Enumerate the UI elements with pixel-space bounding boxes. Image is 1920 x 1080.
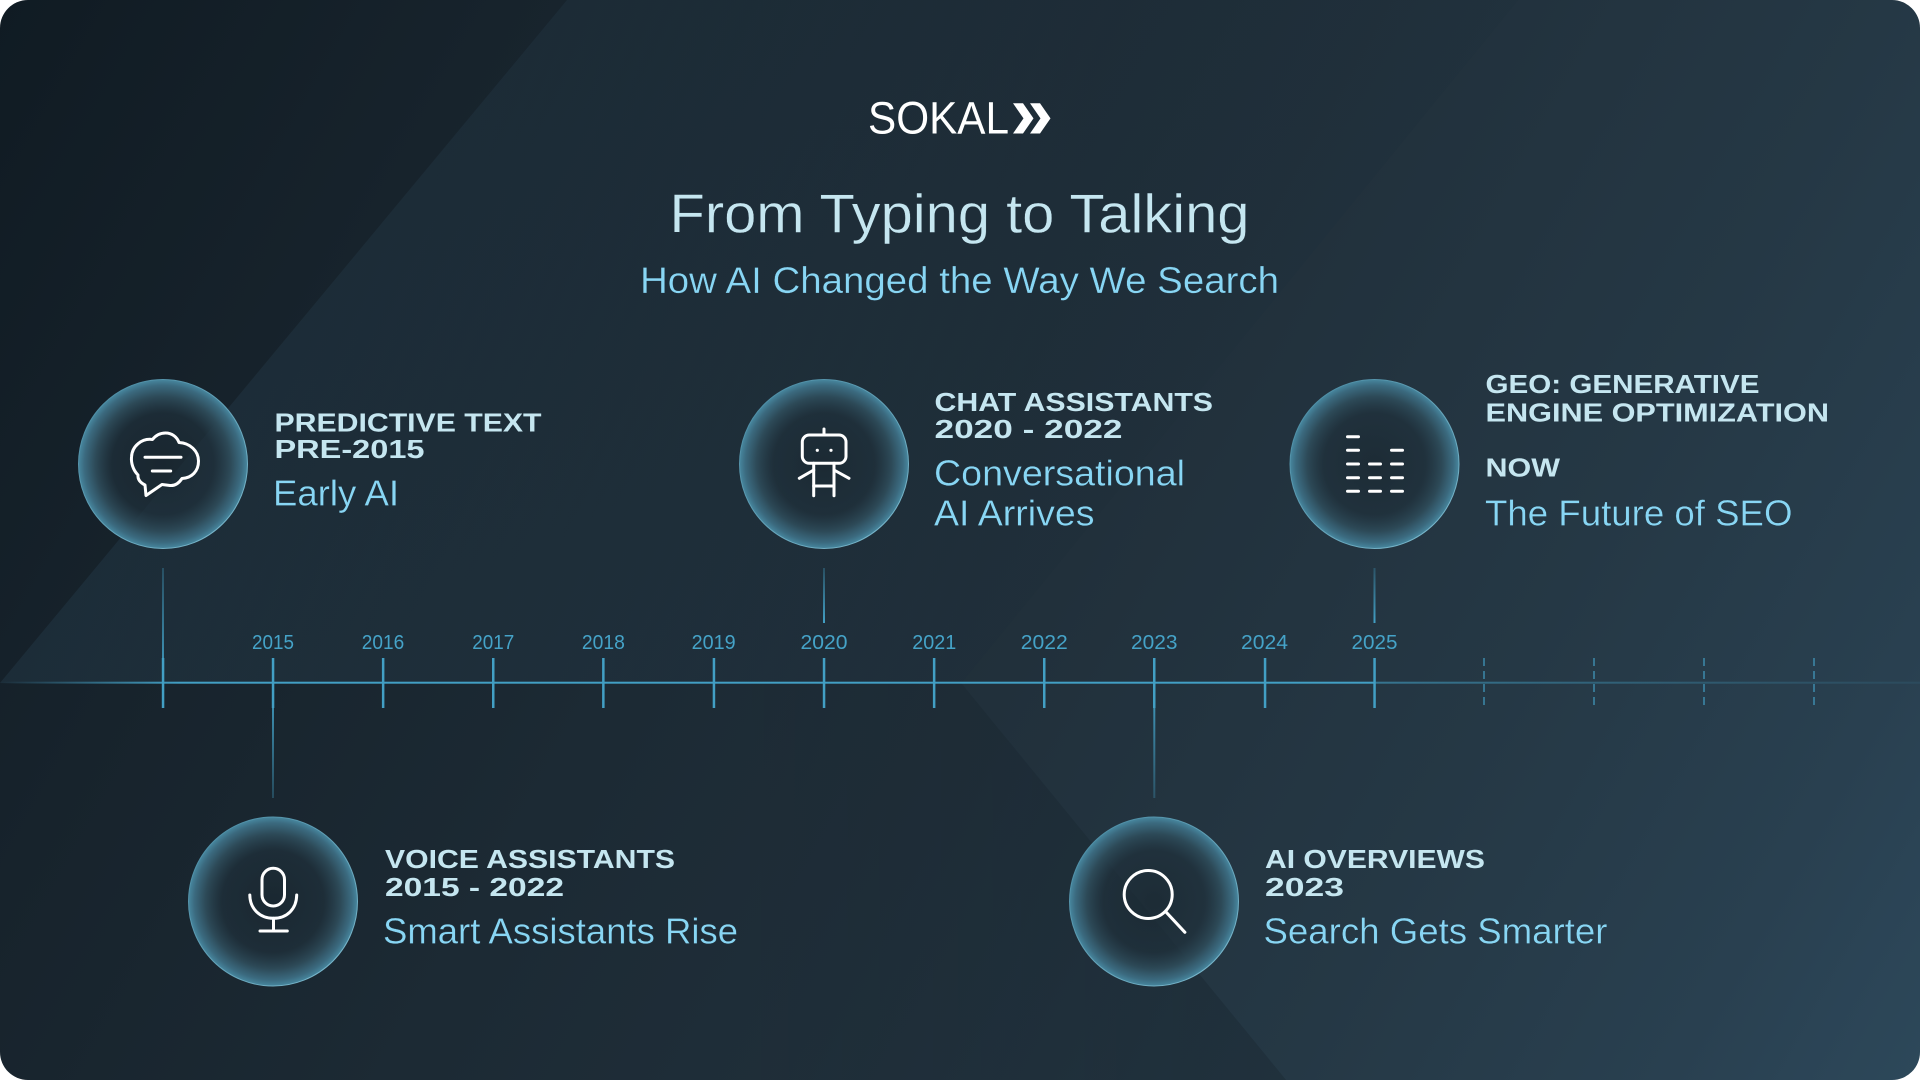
logo: Sokal: SOKAL: [868, 92, 1009, 144]
text: chat assistants: 2020 - 2022: [934, 416, 1122, 444]
text: chat assistants: CHAT ASSISTANTS: [934, 389, 1213, 417]
orb: [740, 380, 908, 548]
year labels: 2020: [800, 632, 848, 654]
text: voice assistants: Smart Assistants Rise: [383, 910, 738, 952]
year labels: 2021: [912, 632, 956, 654]
text: GEO: The Future of SEO: [1485, 492, 1792, 534]
year labels: 2025: [1352, 632, 1398, 654]
icon: magnifier: [1124, 870, 1185, 932]
timeline axis: [0, 658, 1920, 708]
text: voice assistants: [383, 846, 738, 952]
year labels: 2024: [1241, 632, 1288, 654]
text: predictive text: PRE-2015: [274, 436, 424, 464]
text: AI overviews: AI OVERVIEWS: [1265, 846, 1485, 874]
icon: robot: [799, 429, 849, 496]
text: GEO: GEO: GENERATIVE: [1486, 371, 1760, 399]
milestone: GEO: [1290, 371, 1829, 623]
milestone: voice assistants: [188, 683, 738, 986]
text: GEO: NOW: [1486, 454, 1561, 482]
year labels: 2019: [692, 632, 736, 654]
year labels: 2015: [252, 632, 294, 654]
orb: [1290, 380, 1459, 548]
text: chat assistants: [934, 389, 1213, 534]
connector: [1374, 568, 1376, 623]
year labels: 2023: [1131, 632, 1178, 654]
year labels: 2017: [472, 632, 514, 654]
text: predictive text: PREDICTIVE TEXT: [274, 410, 542, 438]
orb: [188, 817, 358, 986]
text: voice assistants: VOICE ASSISTANTS: [385, 846, 675, 874]
text: AI overviews: [1264, 846, 1608, 952]
milestone: AI overviews: [1070, 683, 1608, 986]
text: predictive text: [273, 410, 542, 514]
text: AI overviews: Search Gets Smarter: [1264, 910, 1608, 952]
text: chat assistants: Conversational: [934, 452, 1185, 494]
year labels: 2018: [582, 632, 625, 654]
year labels: 2016: [362, 632, 404, 654]
subtitle: How AI Changed the Way We Search: [640, 260, 1279, 301]
year labels: [252, 632, 1398, 654]
icon: equalizer bars: [1348, 437, 1402, 491]
orb: [1070, 817, 1238, 986]
connector: [823, 568, 825, 623]
milestone: predictive text: [78, 380, 542, 683]
text: AI overviews: 2023: [1265, 874, 1344, 902]
title: From Typing to Talking: [670, 183, 1250, 245]
text: chat assistants: AI Arrives: [934, 492, 1094, 534]
connector: [272, 683, 274, 798]
icon: microphone: [250, 868, 297, 931]
text: GEO: [1485, 371, 1829, 534]
text: predictive text: Early AI: [273, 472, 399, 514]
milestone: chat assistants: [740, 380, 1213, 623]
connector: [1153, 683, 1155, 798]
year labels: 2022: [1021, 632, 1068, 654]
connector: [162, 568, 164, 683]
icon: chat bubble: [131, 433, 198, 496]
text: GEO: ENGINE OPTIMIZATION: [1486, 400, 1829, 428]
text: voice assistants: 2015 - 2022: [385, 874, 564, 902]
orb: [78, 380, 248, 548]
